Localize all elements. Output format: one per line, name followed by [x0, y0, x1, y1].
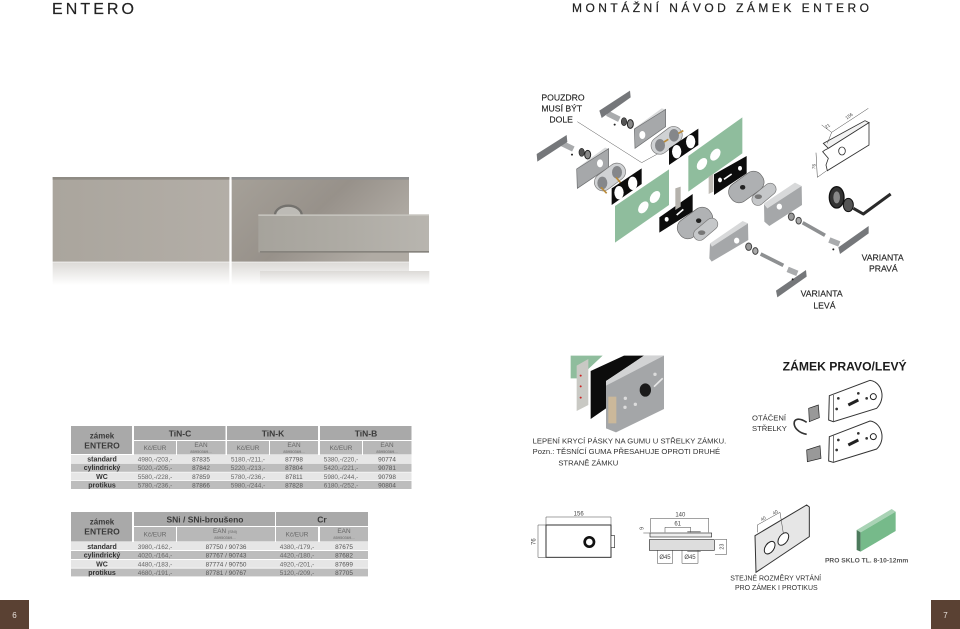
table rows: 87675: [335, 544, 353, 551]
table rows: standard: [87, 544, 117, 551]
table rows: 90798: [378, 474, 396, 481]
table rows: [84, 456, 396, 489]
glass drilling view: 40: [772, 509, 779, 516]
exploded assembly diagram: [537, 91, 904, 310]
table rows: 5380,-/220,-: [324, 456, 358, 464]
front view 156x76: 156: [574, 512, 584, 518]
label: glass thickness: PRO SKLO TL. 8-10-12mm: [825, 557, 909, 564]
note text: LEPENÍ KRYCÍ PÁSKY NA GUMU U STŘELKY ZÁMKU.: [533, 437, 726, 446]
table headers: SNi / SNi-broušeno: [167, 514, 243, 524]
front view 156x76: 76: [531, 538, 537, 545]
table rows: 5780,-/236,-: [138, 482, 172, 489]
labels: PRAVÁ: [869, 263, 898, 273]
table headers: ENTERO: [84, 440, 120, 450]
table rows: 6180,-/252,-: [324, 482, 358, 489]
label: latch rotation: STŘELKY: [752, 424, 787, 433]
table rows: WC: [96, 474, 108, 481]
glass drilling view: [755, 505, 809, 572]
table headers: Kč/EUR: [144, 445, 167, 452]
table headers: Kč/EUR: [237, 445, 260, 452]
lock detail with sealing strip: [533, 356, 907, 467]
page number left: 6: [12, 611, 17, 620]
table rows: 87804: [285, 465, 303, 472]
glass drilling view: 40: [760, 515, 767, 522]
table headers: TiN-C: [169, 428, 191, 438]
table background: [71, 512, 368, 576]
table headers: 85950369...: [333, 535, 355, 540]
table headers: zámek: [90, 432, 115, 440]
table headers: [84, 428, 398, 454]
table headers: EAN: [337, 528, 351, 535]
lever handle: [258, 214, 429, 253]
table rows: cylindrický: [84, 465, 120, 472]
table headers: ENTERO: [84, 526, 120, 536]
note text: Pozn.: TĚSNÍCÍ GUMA PŘESAHUJE OPROTI DRUHÉ: [533, 447, 720, 456]
note: same drilling: PRO ZÁMEK I PROTIKUS: [735, 583, 818, 592]
rosette plates: [591, 123, 686, 194]
note: same drilling: [730, 574, 821, 592]
table rows: WC: [96, 561, 108, 568]
latch rotation diagram: [794, 380, 882, 462]
table rows: 5120,-/209,-: [280, 570, 314, 577]
table headers: Kč/EUR: [144, 532, 167, 538]
strike plate: [53, 177, 229, 262]
cover boxes and rods: [709, 183, 825, 265]
table headers: EAN: [380, 442, 394, 449]
labels: DOLE: [549, 114, 573, 124]
table rows: 90774: [378, 456, 396, 464]
lock plate: [232, 177, 409, 262]
table rows: 4420,-/180,-: [280, 552, 314, 560]
dimension labels: [811, 112, 854, 169]
table rows: 5180,-/211,-: [231, 456, 265, 464]
side view: 140: [675, 512, 686, 518]
note text: STRANĚ ZÁMKU: [558, 458, 618, 467]
table headers: EAN (SNi): [213, 528, 238, 535]
table background: [71, 426, 412, 489]
table headers: Cr: [317, 514, 327, 524]
table rows: 87798: [285, 456, 303, 464]
table rows: 5020,-/205,-: [138, 465, 172, 472]
table rows: 90804: [378, 482, 396, 489]
table rows: 87866: [192, 482, 210, 489]
dimensions row: [531, 505, 909, 592]
dimension drawing: [811, 108, 869, 177]
left handle: [537, 135, 609, 188]
side view: 23: [719, 544, 725, 550]
table rows: 87774 / 90750: [206, 561, 247, 568]
upper left handle: [599, 91, 666, 148]
side view: Ø45: [659, 555, 671, 561]
lower lever handles: [776, 226, 869, 297]
note text: [533, 437, 726, 467]
table headers: 85950369...: [376, 449, 398, 454]
table rows: 87767 / 90743: [206, 552, 247, 560]
table: SNi and Cr finishes: [71, 512, 368, 577]
table rows: protikus: [88, 570, 116, 577]
green glass sample: [857, 509, 896, 552]
table headers: zámek: [90, 518, 115, 526]
table headers: [84, 514, 355, 540]
table rows: 87682: [335, 552, 353, 560]
table rows: 5980,-/244,-: [324, 474, 358, 481]
black lever handle: [829, 187, 891, 214]
label line: [577, 122, 662, 163]
page number right: [931, 600, 960, 629]
table rows: 4020,-/164,-: [138, 552, 172, 560]
heading: lock left/right: ZÁMEK PRAVO/LEVÝ: [783, 359, 907, 374]
dimension labels: 21: [824, 122, 831, 130]
page number left: [0, 600, 29, 629]
table rows: 5580,-/228,-: [138, 474, 172, 481]
table headers: TiN-K: [262, 428, 285, 438]
table rows: standard: [87, 456, 117, 464]
table rows: 87835: [192, 456, 210, 464]
table headers: 85950369...: [190, 449, 212, 454]
table rows: cylindrický: [84, 552, 120, 560]
note: same drilling: STEJNÉ ROZMĚRY VRTÁNÍ: [730, 574, 821, 583]
labels: LEVÁ: [813, 300, 836, 310]
dimension labels: 156: [845, 112, 854, 120]
table rows: 5420,-/221,-: [324, 465, 358, 472]
reflection: [53, 262, 429, 285]
table rows: 5780,-/236,-: [231, 474, 265, 481]
table rows: 4980,-/203,-: [138, 456, 172, 464]
table rows: 4480,-/183,-: [138, 561, 172, 568]
table headers: EAN: [194, 442, 208, 449]
dimension labels: 76: [811, 163, 817, 169]
table headers: Kč/EUR: [330, 445, 353, 452]
lock bodies: [674, 167, 779, 243]
sealing strips: [675, 174, 713, 210]
table rows: 3980,-/162,-: [138, 544, 172, 551]
table headers: Kč/EUR: [286, 532, 309, 538]
labels: MUSÍ BÝT: [541, 103, 583, 113]
table rows: 87828: [285, 482, 303, 489]
table rows: 87705: [335, 570, 353, 577]
table rows: 87842: [192, 465, 210, 472]
strip: [577, 359, 588, 411]
side view: Ø45: [684, 555, 696, 561]
black gaskets: [612, 129, 747, 233]
table rows: 4920,-/201,-: [280, 561, 314, 568]
label: latch rotation: [752, 414, 787, 433]
labels: [541, 92, 904, 310]
green glass corner: [571, 356, 603, 378]
green glass panels: [615, 117, 742, 243]
labels: VARIANTA: [862, 252, 904, 262]
title: ENTERO: ENTERO: [52, 1, 134, 18]
table rows: 87859: [192, 474, 210, 481]
heading: assembly instructions: MONTÁŽNÍ NÁVOD ZÁMEK ENTERO: [572, 0, 869, 15]
labels: VARIANTA: [801, 289, 843, 299]
table headers: TiN-B: [355, 428, 377, 438]
table rows: 87750 / 90736: [206, 544, 247, 551]
table headers: 85950369...: [283, 449, 305, 454]
table rows: 87811: [285, 474, 303, 481]
table: TiN finishes: [71, 426, 412, 489]
product photo: glass door lock: [53, 177, 429, 285]
rosette: [275, 206, 302, 224]
table rows: 87699: [335, 561, 353, 568]
table rows: 4680,-/191,-: [138, 570, 172, 577]
table rows: 5220,-/213,-: [231, 465, 265, 472]
side view: 61: [674, 522, 682, 528]
table rows: protikus: [88, 482, 116, 489]
table rows: 5980,-/244,-: [231, 482, 265, 489]
table rows: 4380,-/179,-: [280, 544, 314, 551]
table headers: EAN: [287, 442, 301, 449]
labels: POUZDRO: [541, 92, 585, 102]
front view 156x76: [531, 512, 615, 557]
label: latch rotation: OTÁČENÍ: [752, 414, 787, 423]
lock body: [606, 356, 664, 432]
table rows: [84, 544, 353, 577]
page number right: 7: [943, 611, 948, 620]
table headers: 85950369...: [214, 535, 236, 540]
side view: [639, 512, 727, 563]
side view: 9: [639, 527, 645, 530]
table rows: 87781 / 90767: [206, 570, 247, 577]
gasket: [591, 356, 644, 419]
table rows: 90781: [378, 465, 396, 472]
